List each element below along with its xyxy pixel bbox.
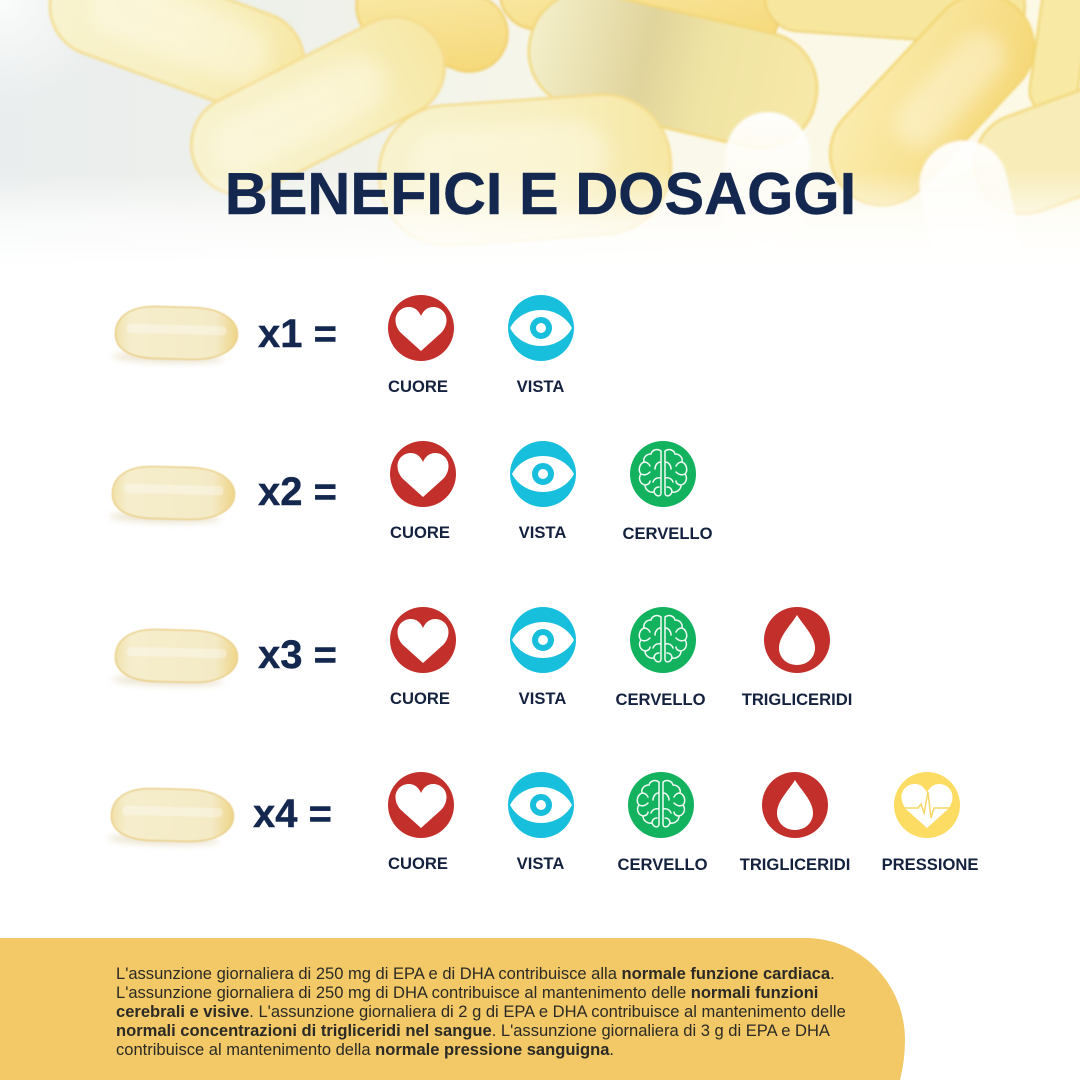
capsule x2 [109,465,235,525]
label: vista: VISTA [519,523,566,542]
title: BENEFICI E DOSAGGI [225,160,856,227]
icon: blood pressure heart [894,772,960,838]
hero photo: capsules [0,0,1080,247]
icon: brain [630,441,696,507]
capsule x3 [112,628,238,688]
label: vista: VISTA [517,854,564,873]
label: vista: VISTA [517,377,564,396]
dose x4: x4 = [253,792,332,836]
dose x1: x1 = [258,312,337,356]
label: vista: VISTA [519,689,566,708]
label: cuore: CUORE [388,377,448,396]
icon: heart [388,295,454,361]
icon: eye [510,607,576,673]
footer disclaimer text: normali concentrazioni di trigliceridi nel sangue. L'assunzione giornaliera di 3 g di EPA e DHA [116,1021,829,1040]
icon: eye [508,295,574,361]
label: cuore: CUORE [390,523,450,542]
row 1: one capsule [112,295,574,396]
icon: eye [508,772,574,838]
label: pressione: PRESSIONE [882,855,978,874]
dose x3: x3 = [258,633,337,677]
icon: heart [390,607,456,673]
capsule x1 [112,305,238,365]
capsule x4 [108,787,234,847]
footer disclaimer text: contribuisce al mantenimento della normale pressione sanguigna. [116,1040,614,1059]
dose x2: x2 = [258,470,337,514]
icon: heart [390,441,456,507]
label: cervello: CERVELLO [617,855,708,874]
label: cervello: CERVELLO [622,524,713,543]
soft inner glows [80,0,1016,202]
icon: heart [388,772,454,838]
icon: eye [510,441,576,507]
label: cuore: CUORE [388,854,448,873]
row 2: two capsules [109,441,713,543]
label: cervello: CERVELLO [615,690,706,709]
footer disclaimer text: L'assunzione giornaliera di 250 mg di DHA contribuisce al mantenimento delle normali funzioni [116,983,818,1002]
footer disclaimer text: L'assunzione giornaliera di 250 mg di EPA e di DHA contribuisce alla normale funzione cardiaca. [116,964,835,983]
footer panel [0,938,905,1080]
label: cuore: CUORE [390,689,450,708]
label: trigliceridi: TRIGLICERIDI [742,690,852,709]
label: trigliceridi: TRIGLICERIDI [740,855,850,874]
icon: blood drop [764,607,830,673]
icon: brain [628,772,694,838]
row 3: three capsules [112,607,852,709]
icon: brain [630,607,696,673]
footer disclaimer text: cerebrali e visive. L'assunzione giornaliera di 2 g di EPA e DHA contribuisce al mantenimento delle [116,1002,846,1021]
row 4: four capsules [108,772,978,874]
icon: blood drop [762,772,828,838]
